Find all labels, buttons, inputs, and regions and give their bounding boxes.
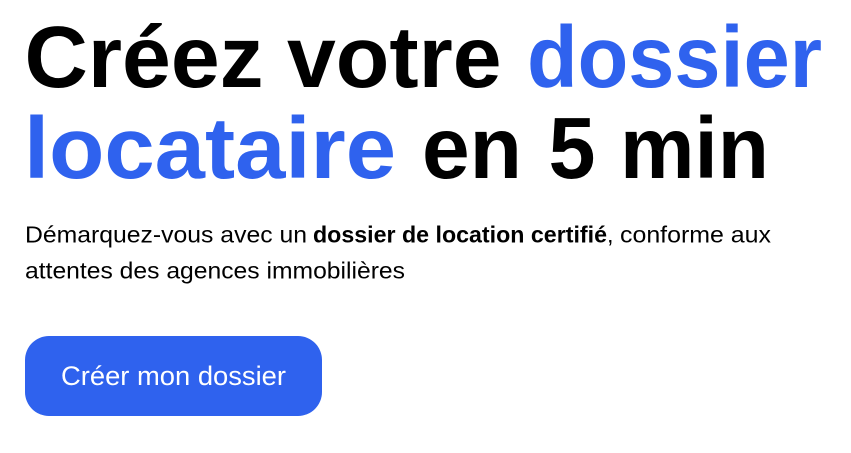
- title: locataire: [24, 100, 396, 197]
- title: [24, 9, 822, 197]
- title: 5: [548, 100, 596, 197]
- title: votre: [287, 9, 502, 106]
- description text: ,: [607, 222, 614, 248]
- description text: attentes des agences immobilières: [25, 258, 405, 284]
- button: create dossier: Créer mon dossier: [61, 361, 286, 391]
- button: create dossier: [25, 336, 322, 416]
- title: dossier: [527, 9, 822, 106]
- description text: dossier de location certifié: [313, 222, 607, 248]
- description text: [25, 222, 771, 284]
- description text: Démarquez-vous avec un: [25, 222, 307, 248]
- title: Créez: [24, 9, 264, 106]
- description text: conforme aux: [620, 222, 771, 248]
- title: min: [620, 100, 769, 197]
- title: en: [422, 100, 522, 197]
